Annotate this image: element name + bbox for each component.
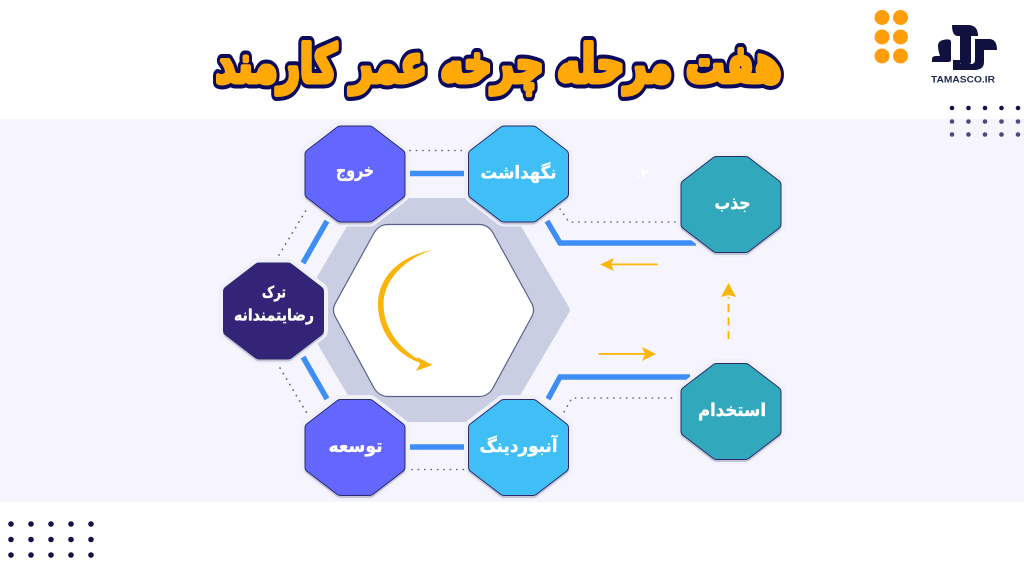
step: نگهداشت bbox=[474, 132, 563, 218]
step: جذب: جذب bbox=[714, 193, 750, 214]
title: هفت مرحله چرخه عمر کارمند bbox=[216, 35, 782, 95]
step: خروج: خروج bbox=[336, 160, 374, 182]
step: استخدام: استخدام bbox=[698, 400, 766, 421]
step: استخدام bbox=[686, 369, 776, 456]
step: خروج bbox=[310, 132, 400, 218]
arrow: left bbox=[600, 258, 658, 271]
step: ترک رضایتمندانه: رضایتمندانه bbox=[234, 306, 314, 324]
step: آنبوردینگ: آنبوردینگ bbox=[480, 434, 558, 457]
inner hexagon bbox=[334, 224, 534, 396]
dots: bottom left bbox=[8, 521, 94, 558]
faint number: ۴. bbox=[636, 167, 649, 182]
step: آنبوردینگ bbox=[474, 405, 563, 492]
title: هفت مرحله چرخه عمر کارمند bbox=[216, 35, 782, 95]
step: توسعه bbox=[310, 405, 400, 492]
outer hexagon bbox=[302, 202, 566, 418]
logo: Tamasco: TAMASCO.IR bbox=[931, 74, 996, 84]
step: ترک رضایتمندانه bbox=[229, 268, 318, 356]
icon: center cycle arrow bbox=[378, 250, 432, 371]
step: جذب bbox=[686, 162, 776, 249]
dotted connector lines bbox=[279, 150, 678, 470]
step: توسعه: توسعه bbox=[328, 436, 382, 457]
arrow: up dashed bbox=[721, 283, 736, 339]
icon: orange dot grid bbox=[874, 10, 908, 64]
arrow: right bbox=[598, 347, 656, 361]
step: نگهداشت: نگهداشت bbox=[480, 162, 556, 184]
dots: top right bbox=[950, 106, 1020, 137]
background band bbox=[0, 119, 1024, 502]
connector lines bbox=[303, 174, 696, 447]
step: ترک رضایتمندانه: ترک bbox=[262, 282, 286, 302]
logo: Tamasco bbox=[931, 25, 997, 84]
